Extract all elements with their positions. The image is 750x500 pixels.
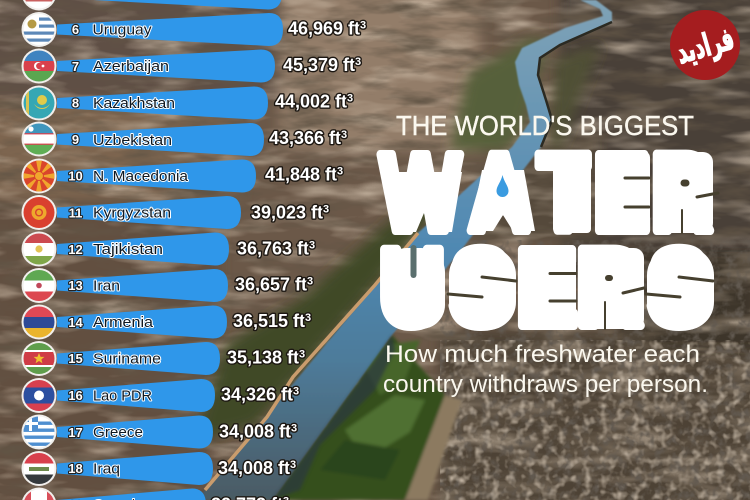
row 13: Iran xyxy=(22,268,313,303)
row 9: Uzbekistan: Uzbekistan xyxy=(93,132,172,149)
row 17: Greece xyxy=(22,414,297,450)
row 18: Iraq: 3 xyxy=(290,459,296,471)
row 17: Greece: 17 xyxy=(68,425,83,440)
row 15: Suriname xyxy=(22,341,305,376)
row 7: Azerbaijan: 7 xyxy=(72,59,79,74)
row 10: N. Macedonia: N. Macedonia xyxy=(93,168,189,185)
row 18: Iraq xyxy=(22,451,296,486)
subtitle: country withdraws per person. xyxy=(383,371,708,398)
row 15: Suriname: 35,138 ft xyxy=(227,348,299,368)
row 7: Azerbaijan: 3 xyxy=(355,56,361,68)
subtitle: How much freshwater each xyxy=(385,341,700,368)
row 5: partially cropped xyxy=(22,0,282,10)
big title: USERS: USERS xyxy=(378,226,710,349)
farm fields xyxy=(272,335,462,500)
row 8: Kazakhstan: 3 xyxy=(347,92,353,104)
row 6: Uruguay: 6 xyxy=(72,22,79,37)
row 17: Greece: 34,008 ft xyxy=(219,422,291,442)
canal xyxy=(197,0,612,500)
row 11: Kyrgyzstan: 39,023 ft xyxy=(251,202,323,222)
row 13: Iran: 13 xyxy=(68,278,83,293)
subtitle xyxy=(383,341,708,398)
row 12: Tajikistan: 36,763 ft xyxy=(237,238,309,258)
row 12: Tajikistan: 3 xyxy=(309,240,315,252)
row 13: Iran: 3 xyxy=(307,276,313,288)
icon: water drop xyxy=(496,175,508,197)
row 7: Azerbaijan: 45,379 ft xyxy=(283,55,355,75)
row 14: Armenia: 14 xyxy=(68,315,83,330)
row 18: Iraq: Iraq xyxy=(93,460,120,478)
row 11: Kyrgyzstan: 11 xyxy=(69,206,82,220)
row 14: Armenia: Armenia xyxy=(93,314,154,331)
row 14: Armenia xyxy=(22,304,311,340)
row 11: Kyrgyzstan: 3 xyxy=(323,204,329,216)
row 8: Kazakhstan: Kazakhstan xyxy=(93,95,175,112)
row 10: N. Macedonia: 3 xyxy=(337,166,343,178)
row 10: N. Macedonia: 41,848 ft xyxy=(265,164,337,184)
row 9: Uzbekistan xyxy=(22,122,347,156)
row 12: Tajikistan: 12 xyxy=(68,242,83,257)
row 6: Uruguay xyxy=(22,12,366,47)
row 9: Uzbekistan: 43,366 ft xyxy=(269,128,341,148)
row 12: Tajikistan xyxy=(22,232,315,266)
row 6: Uruguay: 3 xyxy=(360,20,366,32)
row 16: Lao PDR: 16 xyxy=(68,388,83,403)
row 11: Kyrgyzstan: Kyrgyzstan xyxy=(93,204,171,222)
row 16: Lao PDR: Lao PDR xyxy=(93,388,152,404)
row 6: Uruguay: 46,969 ft xyxy=(288,18,360,38)
row 14: Armenia: 3 xyxy=(305,312,311,324)
row 13: Iran: 36,657 ft xyxy=(235,274,307,294)
row 14: Armenia: 36,515 ft xyxy=(233,311,305,331)
row 8: Kazakhstan: 8 xyxy=(72,96,79,110)
row 10: N. Macedonia xyxy=(22,158,343,194)
row 8: Kazakhstan xyxy=(22,86,353,120)
row 9: Uzbekistan: 3 xyxy=(341,129,347,141)
heading line: THE WORLD'S BIGGEST xyxy=(396,110,694,141)
row 11: Kyrgyzstan xyxy=(22,195,329,230)
row 18: Iraq: 34,008 ft xyxy=(218,458,290,478)
row 15: Suriname: 15 xyxy=(68,351,83,366)
row 16: Lao PDR: 34,326 ft xyxy=(221,384,293,404)
big title: WATER: WATER xyxy=(380,131,712,254)
row 9: Uzbekistan: 9 xyxy=(72,132,79,147)
row 18: Iraq: 18 xyxy=(68,461,83,476)
ranking chart xyxy=(22,0,366,500)
row 15: Suriname: 3 xyxy=(299,348,305,360)
row 12: Tajikistan: Tajikistan xyxy=(93,241,163,258)
row 17: Greece: Greece xyxy=(93,424,143,441)
row 7: Azerbaijan xyxy=(22,48,361,84)
row 8: Kazakhstan: 44,002 ft xyxy=(275,92,347,112)
row 15: Suriname: Suriname xyxy=(93,350,161,368)
row 13: Iran: Iran xyxy=(93,278,120,294)
row 10: N. Macedonia: 10 xyxy=(68,168,83,184)
green banks xyxy=(195,38,600,440)
row 17: Greece: 3 xyxy=(291,422,297,434)
row 16: Lao PDR xyxy=(22,378,299,413)
row 6: Uruguay: Uruguay xyxy=(92,22,152,38)
row 16: Lao PDR: 3 xyxy=(293,386,299,398)
row 7: Azerbaijan: Azerbaijan xyxy=(93,58,169,75)
row 19: Canada, cropped at the bottom xyxy=(22,488,289,500)
